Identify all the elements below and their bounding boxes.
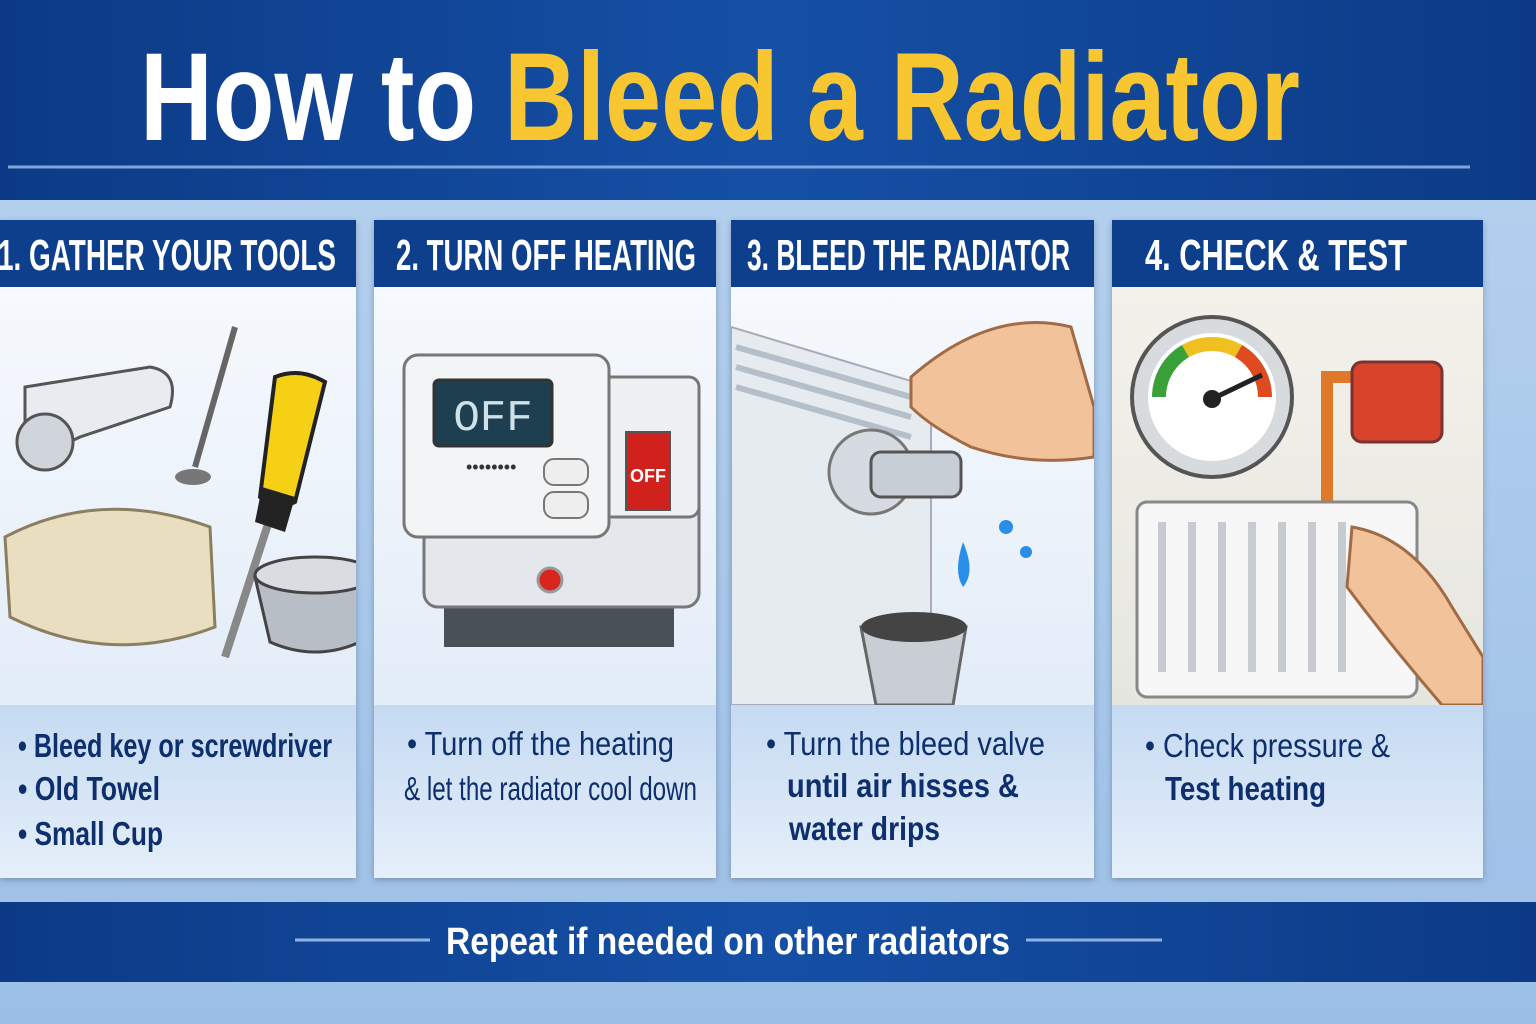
illustration: thermostat: OFF (630, 466, 666, 486)
panel: bleed the radiator (731, 220, 1094, 878)
heading 4 (1112, 220, 1483, 287)
bottom banner (0, 902, 1536, 982)
text: check instructions: • Check pressure & (1145, 727, 1390, 764)
illustration: thermostat: OFF (453, 394, 533, 444)
text: turn off instructions: • Turn off the heating (407, 725, 674, 762)
illustration: gauge, radiator, hand (1112, 287, 1483, 705)
text: check instructions (1112, 705, 1483, 878)
text: turn off instructions (374, 705, 716, 878)
illustration: thermostat: •••••••• (466, 457, 516, 477)
panel: gather tools (0, 220, 356, 878)
illustration: valve and water (731, 287, 1094, 705)
illustration: tools (0, 287, 356, 705)
text: bleed instructions: until air hisses & (787, 767, 1019, 804)
text: bleed instructions: • Turn the bleed valve (766, 725, 1045, 762)
text: bleed instructions (731, 705, 1094, 878)
text: tool list (0, 705, 356, 878)
heading 2 (374, 220, 716, 287)
panel: check and test (1112, 220, 1483, 878)
illustration: thermostat (374, 287, 716, 705)
title: How to Bleed a Radiator (140, 28, 1300, 167)
heading 3 (731, 220, 1094, 287)
panel: turn off heating (374, 220, 716, 878)
text: bleed instructions: water drips (788, 810, 940, 847)
banner text: Repeat if needed on other radiators (446, 921, 1010, 963)
text: tool list: • Small Cup (18, 815, 163, 852)
text: tool list: • Old Towel (18, 770, 160, 807)
header band (0, 0, 1536, 200)
text: check instructions: Test heating (1165, 770, 1326, 807)
